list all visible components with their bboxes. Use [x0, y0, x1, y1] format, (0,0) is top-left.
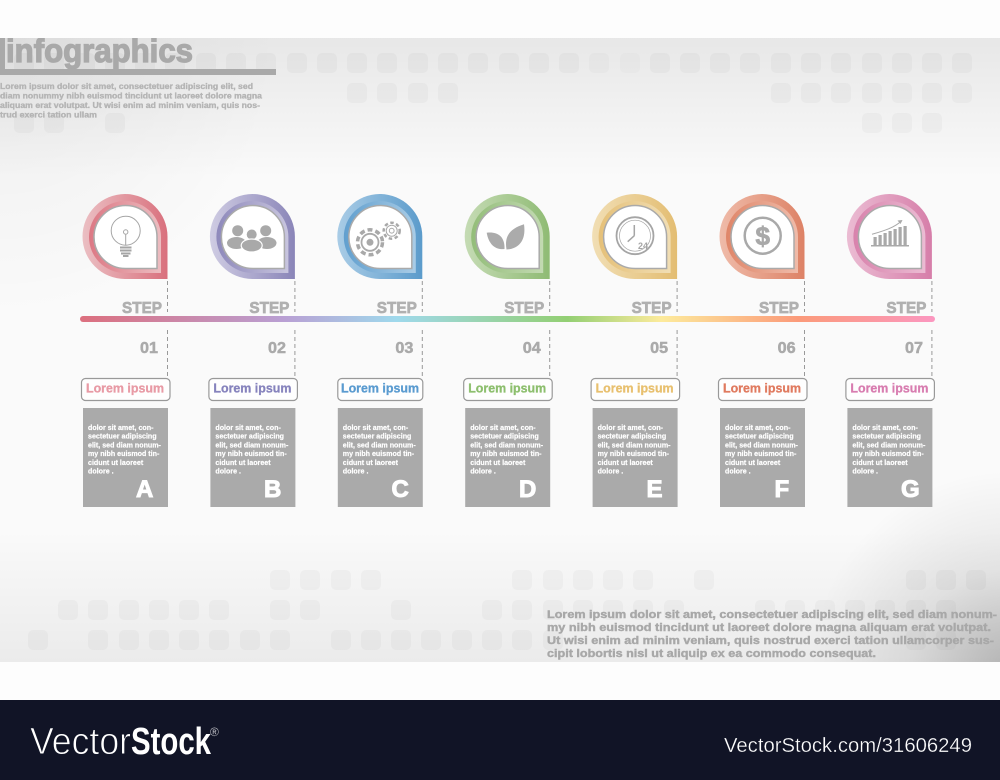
label box: Lorem ipsum — [596, 382, 674, 396]
description card: sectetuer adipiscing — [343, 433, 411, 441]
description card — [720, 408, 805, 507]
step connector — [549, 281, 551, 376]
description card: A — [136, 476, 153, 503]
description card: B — [264, 476, 281, 503]
description card: cidunt ut laoreet — [852, 459, 908, 467]
title — [0, 38, 276, 75]
step label: STEP — [632, 300, 672, 317]
label box: Lorem ipsum — [341, 382, 419, 396]
description card: elit, sed diam nonum- — [88, 441, 162, 449]
label box — [718, 378, 807, 400]
description card: my nibh euismod tin- — [88, 450, 160, 458]
label box — [591, 378, 680, 400]
description card: C — [392, 476, 409, 503]
description card: elit, sed diam nonum- — [215, 441, 289, 449]
intro text block — [0, 81, 262, 120]
label box — [209, 378, 297, 400]
pin: blue — [337, 194, 422, 279]
icon: dollar coin — [745, 218, 781, 254]
icon: people — [227, 225, 276, 252]
intro text block: diam nonummy nibh euismod tincidunt ut laoreet dolore magna — [0, 90, 262, 100]
step 2 — [209, 194, 297, 507]
pin: pink — [847, 194, 932, 279]
description card: dolor sit amet, con- — [343, 424, 409, 432]
description card: sectetuer adipiscing — [470, 433, 539, 441]
icon: leaves — [487, 224, 524, 250]
description card: E — [646, 476, 663, 503]
step number: 06 — [778, 340, 796, 357]
step 1 — [82, 194, 170, 507]
description card: sectetuer adipiscing — [852, 433, 921, 441]
step label: STEP — [886, 300, 927, 317]
label box — [464, 378, 552, 400]
pin: yellow — [592, 194, 677, 279]
step label: STEP — [759, 300, 799, 317]
step connector — [931, 281, 933, 376]
description card — [210, 408, 295, 507]
description card: sectetuer adipiscing — [215, 433, 284, 441]
description card: elit, sed diam nonum- — [470, 441, 544, 449]
icon: growth chart — [871, 220, 909, 246]
step connector — [804, 281, 806, 376]
description card: dolore . — [343, 468, 368, 476]
step 4 — [464, 194, 552, 507]
description card: my nibh euismod tin- — [215, 450, 287, 458]
description card: elit, sed diam nonum- — [598, 441, 671, 449]
description card: dolore . — [88, 468, 114, 476]
description card: dolor sit amet, con- — [88, 424, 154, 432]
title: infographics — [6, 32, 193, 69]
description card: elit, sed diam nonum- — [852, 441, 926, 449]
bottom text block: Lorem ipsum dolor sit amet, consectetuer adipiscing elit, sed diam nonum- — [547, 609, 997, 621]
bottom text block: Ut wisi enim ad minim veniam, quis nostrud exerci tation ullamcorper sus- — [547, 635, 994, 647]
description card: dolore . — [725, 468, 751, 476]
icon: light bulb — [111, 216, 140, 256]
label box — [846, 378, 934, 400]
description card — [847, 408, 932, 507]
description card: F — [774, 476, 789, 503]
description card: elit, sed diam nonum- — [343, 441, 416, 449]
step connector — [294, 281, 296, 376]
step number: 03 — [395, 340, 414, 357]
description card — [465, 408, 550, 507]
step label: STEP — [377, 300, 417, 317]
label box — [82, 378, 170, 400]
intro text block: aliquam erat volutpat. Ut wisi enim ad minim veniam, quis nos- — [0, 100, 260, 110]
description card: my nibh euismod tin- — [343, 450, 415, 458]
icon: 24 hour clock — [616, 217, 654, 254]
description card: dolore . — [470, 468, 496, 476]
pin: orange — [720, 194, 804, 279]
description card: sectetuer adipiscing — [598, 433, 666, 441]
description card: my nibh euismod tin- — [598, 450, 670, 458]
icon: dollar coin: $ — [755, 221, 770, 251]
description card: my nibh euismod tin- — [470, 450, 542, 458]
description card: sectetuer adipiscing — [725, 433, 794, 441]
step label: STEP — [249, 300, 290, 317]
step connector — [421, 281, 423, 376]
pin: green — [465, 194, 550, 279]
pin: purple — [210, 194, 295, 279]
description card: dolor sit amet, con- — [215, 424, 281, 432]
step number: 05 — [650, 340, 668, 357]
step connector — [166, 281, 168, 376]
step 7 — [846, 194, 934, 507]
intro text block: trud exerci tation ullam — [0, 110, 97, 120]
label box — [338, 378, 423, 400]
description card: cidunt ut laoreet — [725, 459, 781, 467]
footer image id: VectorStock.com/31606249 — [724, 735, 972, 757]
footer logo: ® — [210, 725, 219, 739]
description card: cidunt ut laoreet — [88, 459, 144, 467]
description card: elit, sed diam nonum- — [725, 441, 799, 449]
description card: my nibh euismod tin- — [725, 450, 797, 458]
rainbow timeline bar — [80, 316, 935, 322]
description card: dolore . — [852, 468, 878, 476]
label box: Lorem ipsum — [723, 382, 801, 396]
step connector — [676, 281, 678, 376]
description card: cidunt ut laoreet — [598, 459, 653, 467]
label box: Lorem ipsum — [86, 382, 164, 396]
step 5 — [591, 194, 680, 507]
step number: 02 — [268, 340, 286, 357]
description card — [593, 408, 678, 507]
step 3 — [337, 194, 423, 507]
bottom text block: my nibh euismod tincidunt ut laoreet dolore magna aliquam erat volutpat. — [547, 622, 991, 634]
footer logo — [30, 721, 219, 763]
icon: 24 hour clock: 24 — [638, 241, 648, 251]
description card: my nibh euismod tin- — [852, 450, 924, 458]
label box: Lorem ipsum — [468, 382, 546, 396]
description card: D — [519, 476, 536, 503]
background tile pattern — [14, 53, 986, 650]
footer logo: Vector — [30, 721, 131, 763]
step label: STEP — [122, 300, 162, 317]
description card: dolor sit amet, con- — [852, 424, 918, 432]
footer logo: Stock — [131, 721, 212, 763]
description card — [338, 408, 423, 507]
description card: dolor sit amet, con- — [470, 424, 536, 432]
bottom text block — [547, 609, 997, 660]
step number: 04 — [523, 340, 541, 357]
background panel — [0, 38, 1000, 662]
step label: STEP — [504, 300, 545, 317]
description card: dolor sit amet, con- — [598, 424, 664, 432]
description card: cidunt ut laoreet — [470, 459, 526, 467]
description card: cidunt ut laoreet — [215, 459, 271, 467]
description card: sectetuer adipiscing — [88, 433, 157, 441]
description card: dolore . — [215, 468, 241, 476]
step 6 — [718, 194, 807, 507]
description card: cidunt ut laoreet — [343, 459, 399, 467]
step number: 01 — [140, 340, 158, 357]
pin: red — [82, 194, 168, 279]
step number: 07 — [905, 340, 923, 357]
description card: dolore . — [598, 468, 623, 476]
description card: G — [901, 476, 920, 503]
label box: Lorem ipsum — [213, 382, 291, 396]
bottom text block: cipit lobortis nisl ut aliquip ex ea commodo consequat. — [547, 648, 876, 660]
description card: dolor sit amet, con- — [725, 424, 791, 432]
label box: Lorem ipsum — [850, 382, 928, 396]
description card — [83, 408, 168, 507]
footer banner — [0, 700, 1000, 780]
icon: gears — [358, 223, 400, 255]
intro text block: Lorem ipsum dolor sit amet, consectetuer adipiscing elit, sed — [0, 81, 253, 91]
